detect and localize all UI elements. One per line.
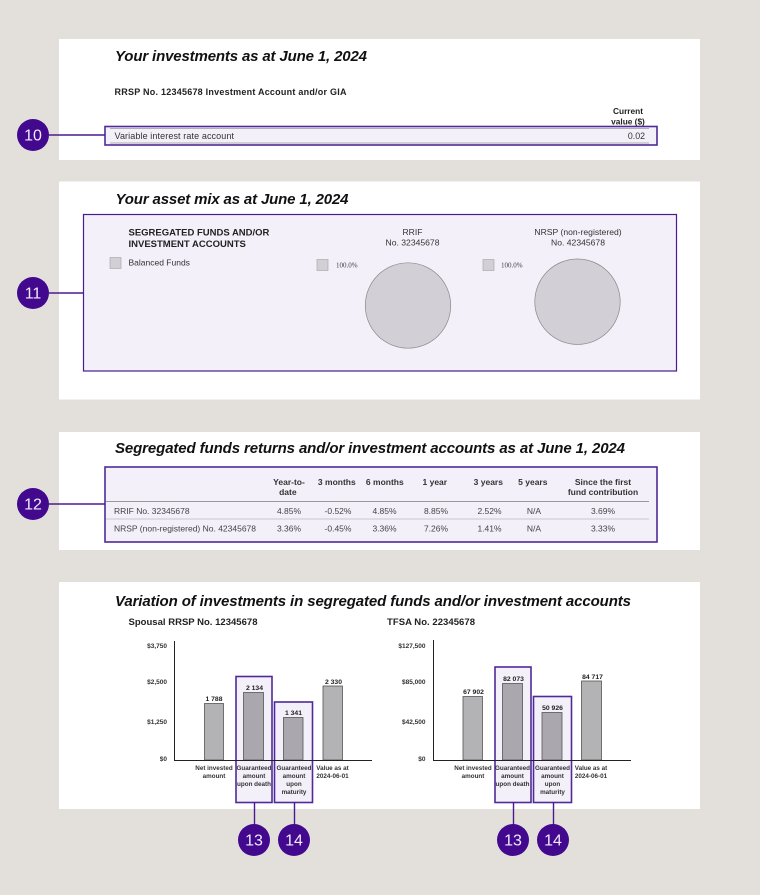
chart: Spousal RRSP xyxy=(128,617,372,802)
row: NRSP: 3.36% xyxy=(372,524,397,534)
y axis labels xyxy=(398,643,426,763)
value labels xyxy=(205,679,342,717)
callout 10: 10 xyxy=(24,128,42,144)
callout 13 left xyxy=(238,802,270,856)
value labels: 82 073 xyxy=(503,676,524,683)
row: RRIF: 4.85% xyxy=(277,506,301,516)
value labels: 1 788 xyxy=(205,696,223,703)
category labels: maturity xyxy=(540,789,565,796)
value labels: 84 717 xyxy=(582,674,603,681)
row: RRIF: 2.52% xyxy=(477,506,502,516)
RRIF title: RRIF xyxy=(402,227,423,237)
table header: 1 year xyxy=(423,477,448,487)
category labels: Net invested xyxy=(195,765,233,772)
callout 14 right xyxy=(537,802,569,856)
category labels: amount xyxy=(203,773,226,780)
category labels: Guaranteed xyxy=(276,765,312,772)
panel: variation of investments xyxy=(59,582,700,809)
value labels: 2 330 xyxy=(325,679,342,686)
y axis labels xyxy=(147,643,167,763)
callout 13 left: 13 xyxy=(245,832,263,850)
category labels: 2024-06-01 xyxy=(316,773,349,780)
category labels xyxy=(454,765,608,796)
heading: variation: Variation of investments in segregated funds and/or investment accounts xyxy=(115,593,631,610)
returns table xyxy=(105,467,657,542)
heading: your investments: Your investments as at June 1, 2024 xyxy=(115,48,368,65)
chart title: TFSA: TFSA No. 22345678 xyxy=(387,617,475,628)
row: RRIF xyxy=(114,506,615,516)
legend: balanced funds: Balanced Funds xyxy=(128,258,190,268)
category labels: amount xyxy=(541,773,565,780)
category labels: maturity xyxy=(282,789,307,796)
value labels: 2 134 xyxy=(246,685,263,692)
row: RRIF: -0.52% xyxy=(325,506,352,516)
NRSP pie chart xyxy=(535,259,620,344)
RRIF legend xyxy=(317,260,358,270)
category labels: amount xyxy=(501,773,525,780)
row: NRSP: -0.45% xyxy=(325,524,352,534)
legend heading: SEGREGATED FUNDS AND/OR xyxy=(128,228,270,238)
highlighted row: variable interest rate account: Variable interest rate account xyxy=(114,131,234,141)
panel: segregated funds returns xyxy=(17,432,700,550)
category labels: upon death xyxy=(237,781,271,788)
category labels: Guaranteed xyxy=(535,765,570,772)
row: RRIF: 4.85% xyxy=(372,506,397,516)
RRIF legend: 100.0% xyxy=(336,262,358,270)
row: NRSP: 7.26% xyxy=(424,524,448,534)
asset mix highlighted box xyxy=(84,214,676,371)
table header: 6 months xyxy=(366,477,404,487)
category labels: 2024-06-01 xyxy=(575,773,608,780)
heading: returns: Segregated funds returns and/or investment accounts as at June 1, 2024 xyxy=(115,440,626,457)
NRSP legend xyxy=(483,260,523,270)
highlight: guaranteed amount upon maturity xyxy=(274,702,312,802)
row: NRSP: 3.33% xyxy=(591,524,615,534)
NRSP title: NRSP (non-registered) xyxy=(534,227,622,237)
category labels: amount xyxy=(283,773,306,780)
table header: 5 years xyxy=(518,477,548,487)
row: NRSP xyxy=(114,524,615,534)
RRIF pie chart xyxy=(365,263,451,348)
callout 13 right: 13 xyxy=(504,832,522,850)
highlighted row: variable interest rate account: 0.02 xyxy=(628,131,645,141)
category labels: upon xyxy=(286,781,302,788)
account label: RRSP No. 12345678 Investment Account and/or GIA xyxy=(114,87,347,97)
row: RRIF: RRIF No. 32345678 xyxy=(114,506,190,516)
column header: current value: Current xyxy=(613,106,643,116)
category labels: upon xyxy=(545,781,560,788)
category labels: upon death xyxy=(496,781,530,788)
panel: asset mix xyxy=(17,182,700,400)
table header: 3 years xyxy=(474,477,503,487)
NRSP legend: 100.0% xyxy=(501,262,523,270)
callout 14 right: 14 xyxy=(544,832,562,850)
category labels: Net invested xyxy=(454,765,492,772)
y axis labels: $3,750 xyxy=(147,643,167,650)
row: NRSP: NRSP (non-registered) No. 42345678 xyxy=(114,524,256,534)
y axis labels: $0 xyxy=(418,756,426,763)
callout 14 left xyxy=(278,802,310,856)
category labels: Guaranteed xyxy=(495,765,530,772)
y axis labels: $42,500 xyxy=(402,719,426,726)
table header: fund contribution xyxy=(568,487,638,497)
category labels xyxy=(195,765,350,796)
highlighted row: variable interest rate account xyxy=(105,126,657,145)
value labels xyxy=(463,674,603,712)
table header: Year-to- xyxy=(273,477,305,487)
heading: asset mix: Your asset mix as at June 1, 2024 xyxy=(116,191,349,208)
axes xyxy=(433,640,631,760)
y axis labels: $85,000 xyxy=(402,679,426,686)
legend heading: INVESTMENT ACCOUNTS xyxy=(128,239,246,250)
y axis labels: $0 xyxy=(160,756,167,763)
callout 12 xyxy=(17,488,105,520)
row: NRSP: 3.36% xyxy=(277,524,301,534)
row: RRIF: 8.85% xyxy=(424,506,448,516)
highlight: guaranteed amount upon death xyxy=(495,667,531,802)
y axis labels: $127,500 xyxy=(398,643,426,650)
chart: TFSA xyxy=(387,617,631,802)
bars xyxy=(463,681,602,760)
value labels: 50 926 xyxy=(542,705,563,712)
column header: current value: value ($) xyxy=(611,116,645,126)
highlight: guaranteed amount upon death xyxy=(236,676,272,802)
NRSP title: No. 42345678 xyxy=(551,238,605,248)
table header: date xyxy=(279,487,297,497)
category labels: amount xyxy=(243,773,266,780)
y axis labels: $1,250 xyxy=(147,719,167,726)
callout 10 xyxy=(17,119,105,151)
y axis labels: $2,500 xyxy=(147,679,167,686)
value labels: 67 902 xyxy=(463,689,484,696)
highlight: guaranteed amount upon maturity xyxy=(534,696,572,802)
callout 11: 11 xyxy=(25,286,41,302)
callout 12: 12 xyxy=(24,496,42,514)
row: NRSP: N/A xyxy=(527,524,541,534)
row: RRIF: N/A xyxy=(527,506,541,516)
category labels: Value as at xyxy=(575,765,608,772)
callout 13 right xyxy=(497,802,529,856)
RRIF title: No. 32345678 xyxy=(386,238,440,248)
callout 11 xyxy=(17,277,84,309)
value labels: 1 341 xyxy=(285,710,302,717)
table header: Since the first xyxy=(575,477,631,487)
axes xyxy=(174,641,372,760)
panel: your investments xyxy=(17,39,700,160)
bars xyxy=(204,686,342,760)
callout 14 left: 14 xyxy=(285,832,303,850)
category labels: Guaranteed xyxy=(236,765,272,772)
row: NRSP: 1.41% xyxy=(477,524,502,534)
row: RRIF: 3.69% xyxy=(591,506,615,516)
category labels: amount xyxy=(462,773,485,780)
category labels: Value as at xyxy=(316,765,350,772)
table header: 3 months xyxy=(318,477,356,487)
legend: balanced funds xyxy=(110,258,190,268)
chart title: Spousal RRSP: Spousal RRSP No. 12345678 xyxy=(128,617,258,628)
